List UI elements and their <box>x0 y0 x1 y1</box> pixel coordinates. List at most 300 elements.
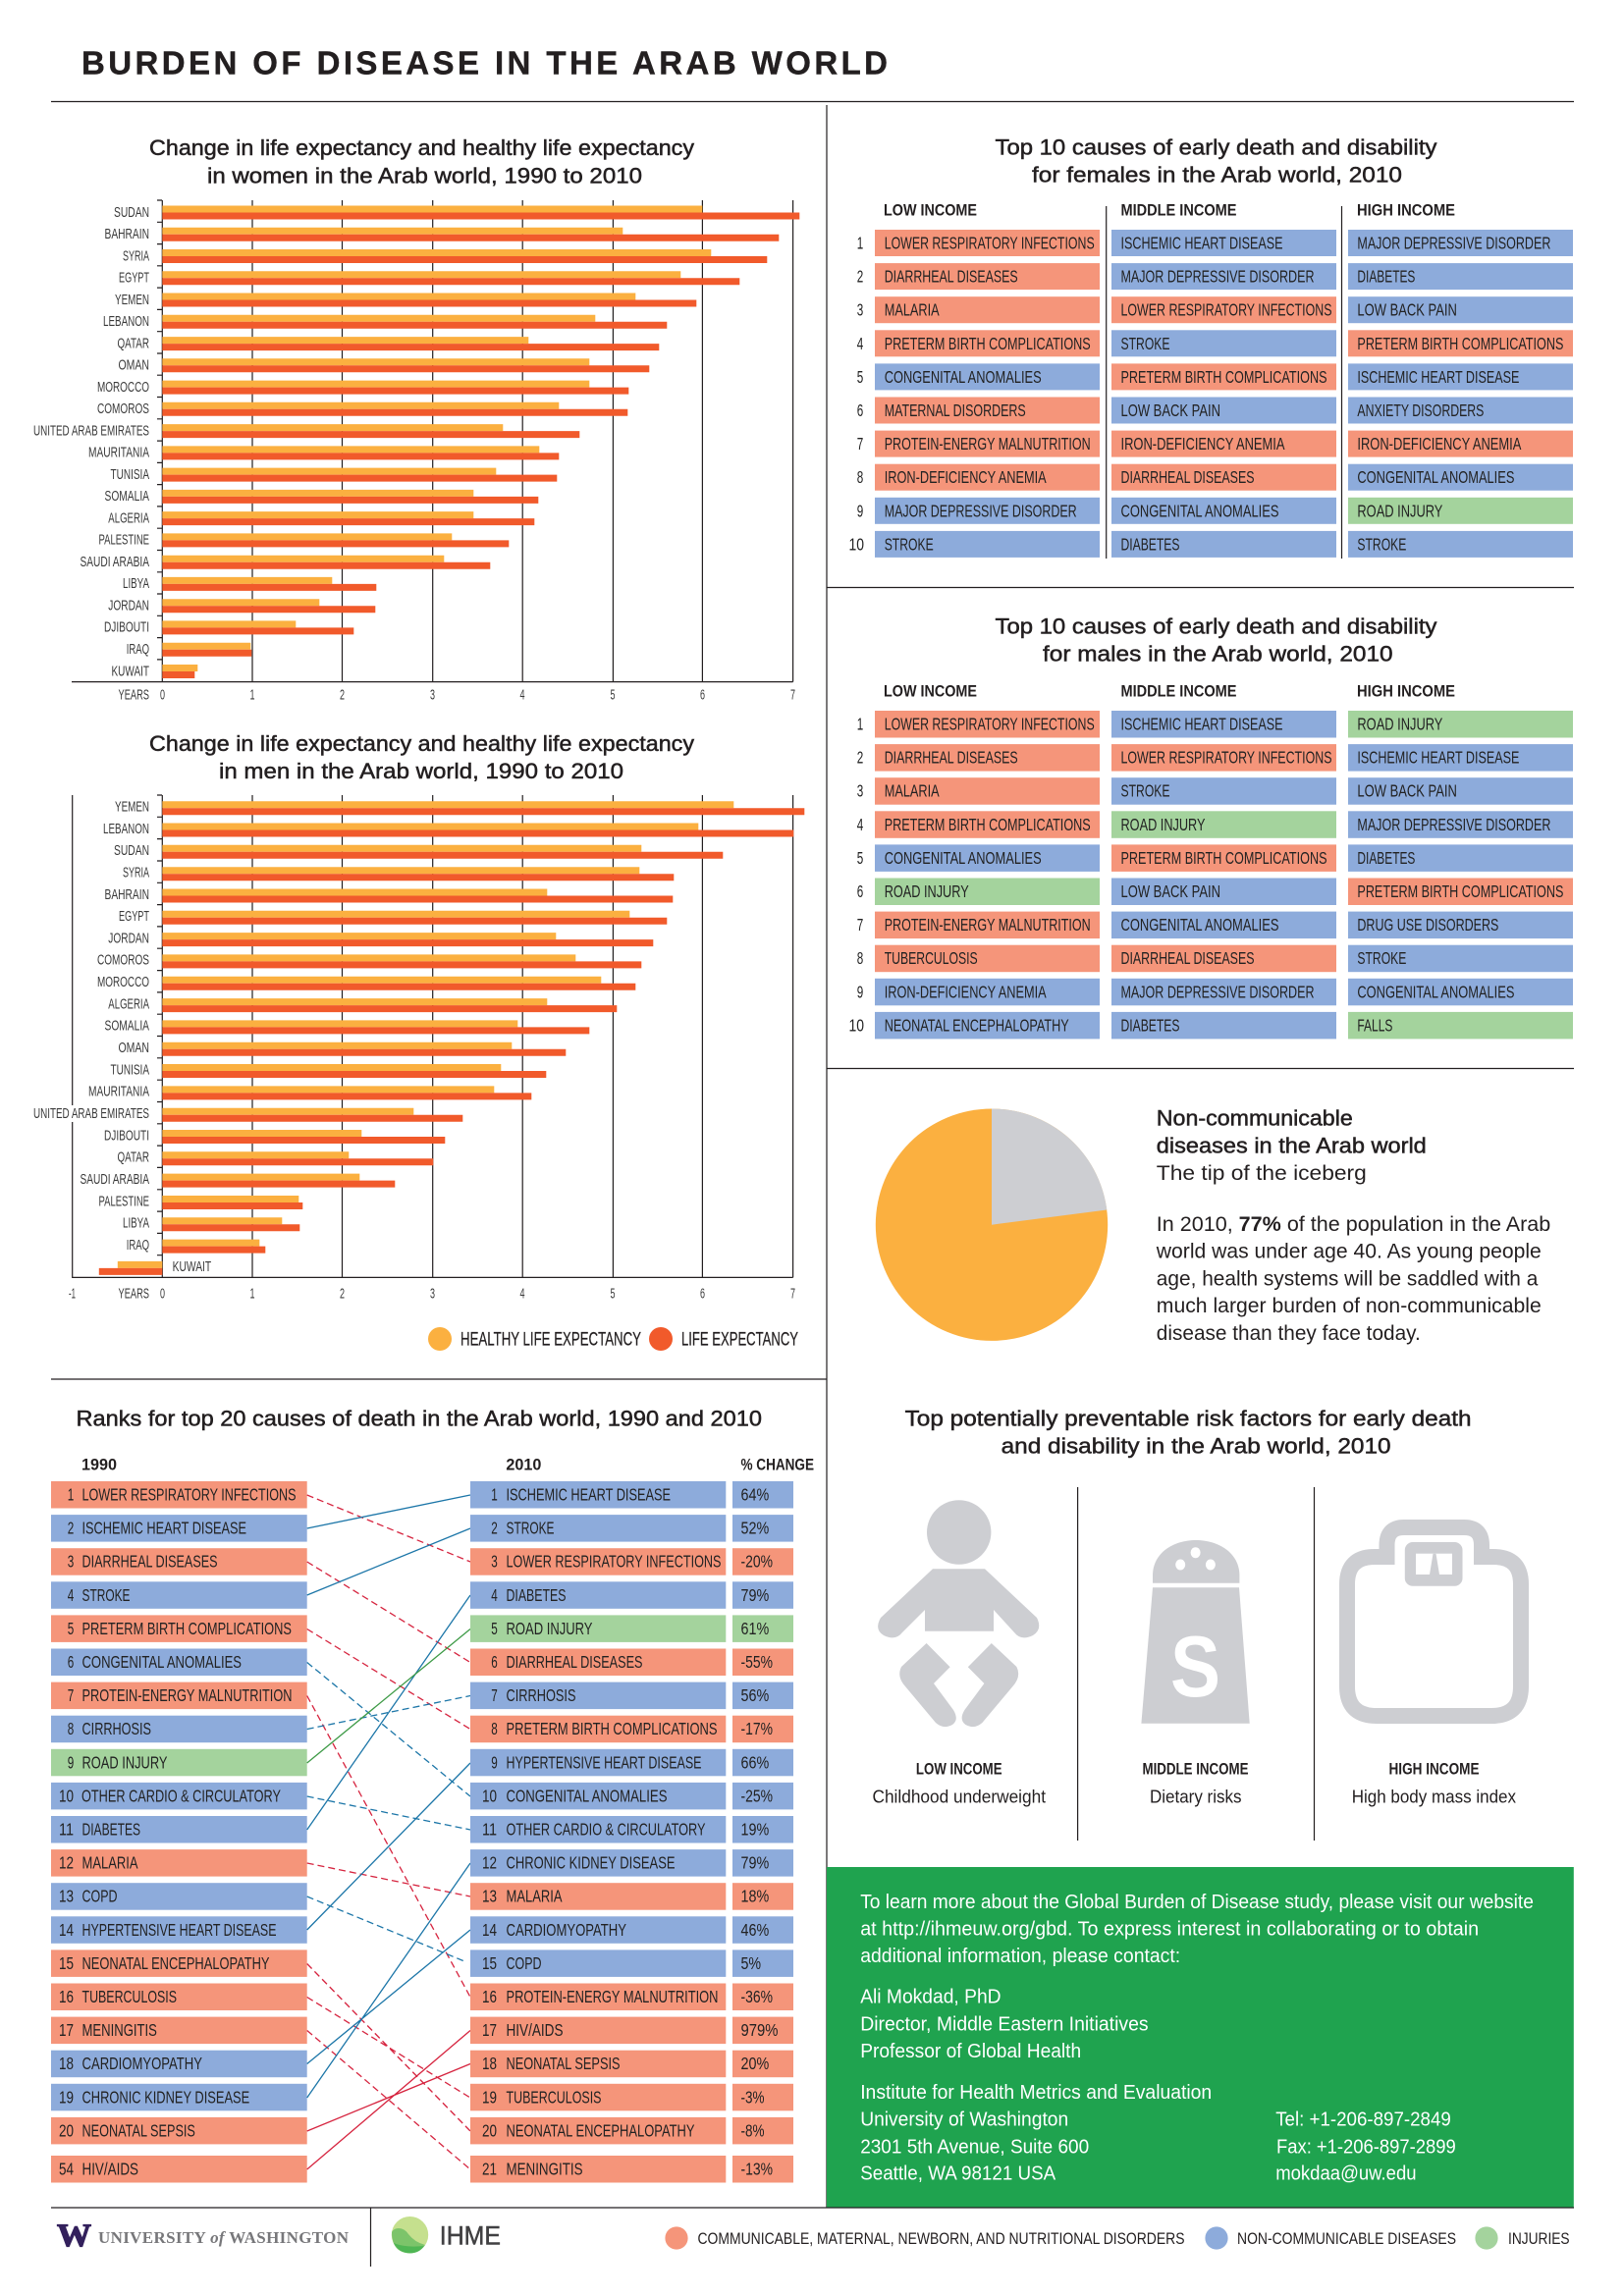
panel: men life expectancy chart <box>33 731 804 1351</box>
title: BURDEN OF DISEASE IN THE ARAB WORLD <box>81 45 888 80</box>
column: 1990 ranks: NEONATAL SEPSIS <box>82 2120 195 2140</box>
column: 1990 ranks: ROAD INJURY <box>82 1752 168 1772</box>
column: middle income females: PRETERM BIRTH COMPLICATIONS <box>1121 367 1327 387</box>
axis labels: men: 5 <box>611 1286 615 1302</box>
column: percent change: 19% <box>740 1820 769 1840</box>
country labels: men: SYRIA <box>123 866 149 881</box>
column: low income females: MALARIA <box>885 300 940 320</box>
column: 2010 ranks: STROKE <box>507 1519 554 1538</box>
column: high income males: DIABETES <box>1357 848 1415 868</box>
bars: healthy life expectancy, men <box>118 801 733 1268</box>
column: high income males <box>1348 711 1573 1039</box>
column: percent change: 46% <box>740 1920 769 1940</box>
column: percent change: -55% <box>740 1652 773 1672</box>
column: 2010 ranks: DIABETES <box>507 1585 566 1605</box>
legend: disease categories: COMMUNICABLE, MATERNAL, NEWBORN, AND NUTRITIONAL DISORDERS <box>697 2230 1184 2248</box>
column: high income females: ROAD INJURY <box>1357 501 1443 520</box>
column: 2010 ranks: 6 <box>491 1652 498 1672</box>
country labels: men: SAUDI ARABIA <box>81 1172 149 1188</box>
rank numbers: males: 1 <box>857 715 863 734</box>
rank numbers: males: 5 <box>857 848 863 868</box>
logo: IHME: IHME <box>440 2221 501 2251</box>
axis labels: women: 7 <box>790 687 795 703</box>
column: 1990 ranks: HYPERTENSIVE HEART DISEASE <box>82 1920 277 1940</box>
chart axes <box>73 795 793 1277</box>
column: low income females: IRON-DEFICIENCY ANEMIA <box>885 467 1047 487</box>
column: 2010 ranks: LOWER RESPIRATORY INFECTIONS <box>507 1552 721 1572</box>
rank numbers: females: 10 <box>848 534 864 554</box>
column: 2010 ranks: 15 <box>482 1953 497 1973</box>
column: 2010 ranks: TUBERCULOSIS <box>507 2087 601 2107</box>
column: 2010 ranks: 18 <box>482 2054 497 2073</box>
column: 2010 ranks: MALARIA <box>507 1887 563 1906</box>
column: low income males: PRETERM BIRTH COMPLICATIONS <box>885 815 1091 834</box>
panel: top 10 causes for females <box>848 134 1573 559</box>
column: 1990 ranks: MALARIA <box>82 1853 138 1873</box>
column headers: females <box>884 200 1455 219</box>
column: 2010 ranks: COPD <box>507 1953 542 1973</box>
column: 2010 ranks: PROTEIN-ENERGY MALNUTRITION <box>507 1987 719 2006</box>
column: 1990 ranks: 10 <box>59 1786 74 1805</box>
column: low income males: IRON-DEFICIENCY ANEMIA <box>885 982 1047 1001</box>
country labels: women: OMAN <box>118 358 149 374</box>
column: 2010 ranks: 5 <box>491 1619 498 1638</box>
column: 1990 ranks: 13 <box>59 1887 74 1906</box>
label: middle income risk <box>1143 1760 1249 1807</box>
column: 2010 ranks: 8 <box>491 1719 498 1738</box>
column: high income males: DRUG USE DISORDERS <box>1357 915 1498 934</box>
label: high income risk: High body mass index <box>1352 1788 1516 1807</box>
column: percent change: -13% <box>740 2160 773 2179</box>
column: 2010 ranks: CARDIOMYOPATHY <box>507 1920 626 1940</box>
rank numbers: males: 10 <box>848 1015 864 1035</box>
country labels: men: DJIBOUTI <box>104 1128 149 1144</box>
column: 1990 ranks: 9 <box>68 1752 74 1772</box>
column: low income females: DIARRHEAL DISEASES <box>885 267 1018 287</box>
country labels: men: JORDAN <box>108 931 149 946</box>
country labels: men: SOMALIA <box>104 1019 149 1035</box>
column: low income males: NEONATAL ENCEPHALOPATHY <box>885 1015 1069 1035</box>
column: 1990 ranks: DIABETES <box>82 1820 140 1840</box>
column: 1990 ranks: 2 <box>68 1519 74 1538</box>
heading: risk factors: and disability in the Arab world, 2010 <box>1001 1434 1391 1459</box>
text block: contact person <box>860 1987 1149 2062</box>
heading: women chart: in women in the Arab world, 1990 to 2010 <box>207 163 642 188</box>
column: 1990 ranks: 4 <box>68 1585 74 1605</box>
rank numbers: males: 2 <box>857 748 863 768</box>
body text: age, health systems will be saddled with a <box>1157 1268 1539 1291</box>
country labels: men: TUNISIA <box>110 1062 149 1078</box>
column: middle income females: CONGENITAL ANOMALIES <box>1121 501 1278 520</box>
column: low income males: DIARRHEAL DISEASES <box>885 748 1018 768</box>
axis labels: women: 1 <box>249 687 255 703</box>
heading: risk factors <box>905 1407 1472 1459</box>
heading: non-communicable diseases: diseases in the Arab world <box>1157 1134 1427 1158</box>
column: 1990 ranks: TUBERCULOSIS <box>82 1987 177 2006</box>
column: middle income females <box>1111 230 1336 558</box>
text block: learn more: additional information, please contact: <box>860 1946 1180 1967</box>
country label: Kuwait: KUWAIT <box>173 1259 211 1275</box>
heading: women chart: Change in life expectancy and healthy life expectancy <box>149 135 694 160</box>
rank numbers: males: 6 <box>857 881 863 901</box>
column: low income males: PROTEIN-ENERGY MALNUTRITION <box>885 915 1091 934</box>
axis labels: men <box>69 1286 795 1302</box>
text block: learn more: at http://ihmeuw.org/gbd. To express interest in collaborating or to obtain <box>860 1918 1479 1940</box>
label: high income risk <box>1352 1760 1516 1807</box>
axis labels: men: 7 <box>790 1286 795 1302</box>
column: low income males <box>875 711 1100 1039</box>
footer <box>51 2208 1574 2267</box>
country labels: men: UNITED ARAB EMIRATES <box>33 1106 149 1122</box>
column: percent change: 79% <box>740 1853 769 1873</box>
country labels: women: SYRIA <box>123 248 149 264</box>
label: low income risk: Childhood underweight <box>872 1788 1046 1807</box>
country labels: women: QATAR <box>118 336 149 351</box>
heading: females: Top 10 causes of early death and disability <box>996 134 1437 159</box>
column: high income females: LOW BACK PAIN <box>1357 300 1457 320</box>
column: 2010 ranks: 7 <box>491 1685 498 1705</box>
column: 2010 ranks: 14 <box>482 1920 497 1940</box>
column: middle income females: ISCHEMIC HEART DISEASE <box>1121 234 1282 253</box>
rank numbers: females: 7 <box>857 434 863 454</box>
column: low income males: TUBERCULOSIS <box>885 948 978 968</box>
column: 1990 ranks: 15 <box>59 1953 74 1973</box>
column: 1990 ranks: 8 <box>68 1719 74 1738</box>
axis labels: women: 2 <box>340 687 345 703</box>
column: high income males: LOW BACK PAIN <box>1357 781 1457 801</box>
country labels: women: KUWAIT <box>112 664 149 679</box>
column: 1990 ranks <box>51 1481 307 2183</box>
body text: In 2010, 77% of the population in the Arab <box>1157 1213 1550 1236</box>
column: high income males: MAJOR DEPRESSIVE DISORDER <box>1357 815 1550 834</box>
column: middle income females: IRON-DEFICIENCY ANEMIA <box>1121 434 1285 454</box>
column headers: ranks: 1990 <box>81 1455 117 1473</box>
column: 2010 ranks: ISCHEMIC HEART DISEASE <box>507 1484 671 1504</box>
column: 1990 ranks: DIARRHEAL DISEASES <box>82 1552 218 1572</box>
axis labels: women: 6 <box>700 687 705 703</box>
column: 1990 ranks: 7 <box>68 1685 74 1705</box>
panel: non-communicable diseases <box>876 1106 1550 1345</box>
chart axes <box>72 200 793 682</box>
legend: life expectancy <box>428 1327 798 1351</box>
rank numbers: males: 9 <box>857 982 863 1001</box>
column: 1990 ranks: PRETERM BIRTH COMPLICATIONS <box>82 1619 292 1638</box>
body text: disease than they face today. <box>1157 1322 1421 1345</box>
column: middle income females: DIARRHEAL DISEASES <box>1121 467 1255 487</box>
column: 1990 ranks: OTHER CARDIO & CIRCULATORY <box>81 1786 281 1805</box>
country labels: men: ALGERIA <box>108 996 149 1012</box>
logo: IHME <box>392 2216 501 2253</box>
column: middle income males: LOW BACK PAIN <box>1121 881 1220 901</box>
rank numbers: males: 8 <box>857 948 863 968</box>
country labels: women: PALESTINE <box>98 533 149 549</box>
column: 1990 ranks: 14 <box>59 1920 74 1940</box>
panel: ranks for top 20 causes of death <box>51 1406 814 2183</box>
column: 2010 ranks: PRETERM BIRTH COMPLICATIONS <box>507 1719 717 1738</box>
column: high income males: FALLS <box>1357 1015 1392 1035</box>
column: 2010 ranks: CONGENITAL ANOMALIES <box>507 1786 668 1805</box>
column: middle income females: LOWER RESPIRATORY INFECTIONS <box>1121 300 1331 320</box>
body text: world was under age 40. As young people <box>1156 1241 1542 1263</box>
column: middle income males: DIARRHEAL DISEASES <box>1121 948 1255 968</box>
column: middle income females: LOW BACK PAIN <box>1121 400 1220 420</box>
country labels: men: LIBYA <box>123 1216 149 1232</box>
panel: contact information <box>827 1867 1574 2208</box>
column: 2010 ranks: 11 <box>482 1820 497 1840</box>
axis labels: men: 4 <box>520 1286 524 1302</box>
text block: address: 2301 5th Avenue, Suite 600 <box>860 2136 1089 2158</box>
bars: healthy life expectancy, women <box>162 206 711 671</box>
column: middle income males: STROKE <box>1121 781 1170 801</box>
column: 2010 ranks: 12 <box>482 1853 497 1873</box>
country labels: women: YEMEN <box>115 293 149 308</box>
rank numbers: females: 8 <box>857 467 863 487</box>
country labels: women: TUNISIA <box>110 467 149 483</box>
country labels: men: COMOROS <box>97 953 149 969</box>
text block: learn more <box>860 1892 1534 1967</box>
country labels: women <box>33 205 149 679</box>
rank numbers: females: 9 <box>857 501 863 520</box>
axis labels: women: 4 <box>520 687 524 703</box>
column: 1990 ranks: CARDIOMYOPATHY <box>82 2054 202 2073</box>
column: low income females: CONGENITAL ANOMALIES <box>885 367 1042 387</box>
axis labels: women: 0 <box>160 687 165 703</box>
column: 1990 ranks: PROTEIN-ENERGY MALNUTRITION <box>82 1685 293 1705</box>
axis labels: women: YEARS <box>118 687 149 703</box>
column: percent change: -20% <box>740 1552 773 1572</box>
logo: University of Washington: W <box>57 2218 91 2254</box>
column: 2010 ranks: HYPERTENSIVE HEART DISEASE <box>507 1752 701 1772</box>
legend: life expectancy: HEALTHY LIFE EXPECTANCY <box>460 1329 641 1351</box>
column: 2010 ranks: MENINGITIS <box>507 2160 583 2179</box>
column: low income females: LOWER RESPIRATORY INFECTIONS <box>885 234 1095 253</box>
column: percent change: 52% <box>740 1519 769 1538</box>
column: 2010 ranks: NEONATAL SEPSIS <box>507 2054 621 2073</box>
heading: non-communicable diseases: Non-communicable <box>1157 1106 1353 1131</box>
label: low income risk: LOW INCOME <box>916 1760 1002 1779</box>
column: middle income males: MAJOR DEPRESSIVE DISORDER <box>1121 982 1314 1001</box>
country labels: women: SUDAN <box>114 205 149 221</box>
column: middle income males: DIABETES <box>1121 1015 1180 1035</box>
axis labels: men: 2 <box>340 1286 345 1302</box>
rank numbers: males: 4 <box>857 815 863 834</box>
column: percent change: 64% <box>740 1484 769 1504</box>
column: 2010 ranks: NEONATAL ENCEPHALOPATHY <box>507 2120 695 2140</box>
column: high income males: CONGENITAL ANOMALIES <box>1357 982 1514 1001</box>
heading: women chart <box>149 135 694 188</box>
column: 1990 ranks: 54 <box>59 2160 74 2179</box>
column: low income females: PRETERM BIRTH COMPLICATIONS <box>885 334 1091 353</box>
heading: ranks: Ranks for top 20 causes of death in the Arab world, 1990 and 2010 <box>77 1406 762 1430</box>
column: 1990 ranks: CONGENITAL ANOMALIES <box>82 1652 242 1672</box>
column: 1990 ranks: CHRONIC KIDNEY DISEASE <box>82 2087 249 2107</box>
body text <box>1156 1213 1550 1345</box>
column: 1990 ranks: STROKE <box>82 1585 130 1605</box>
column: low income females: MAJOR DEPRESSIVE DISORDER <box>885 501 1077 520</box>
column: low income females: PROTEIN-ENERGY MALNUTRITION <box>885 434 1091 454</box>
column: 1990 ranks: NEONATAL ENCEPHALOPATHY <box>82 1953 270 1973</box>
heading: men chart <box>149 731 694 783</box>
column: 1990 ranks: 6 <box>68 1652 74 1672</box>
column: middle income females: DIABETES <box>1121 534 1180 554</box>
country labels: women: UNITED ARAB EMIRATES <box>33 423 149 439</box>
body text: much larger burden of non-communicable <box>1157 1295 1542 1317</box>
icon: salt shaker <box>1141 1540 1250 1724</box>
bars: life expectancy, women <box>162 212 799 678</box>
column: high income females: IRON-DEFICIENCY ANEMIA <box>1357 434 1522 454</box>
country labels: women: BAHRAIN <box>104 227 149 242</box>
column: middle income males: LOWER RESPIRATORY INFECTIONS <box>1121 748 1331 768</box>
panel: women life expectancy chart <box>33 135 799 703</box>
country labels: men: MOROCCO <box>97 975 149 990</box>
column headers: males <box>884 681 1455 700</box>
column: 1990 ranks: 16 <box>59 1987 74 2006</box>
column: 1990 ranks: ISCHEMIC HEART DISEASE <box>82 1519 246 1538</box>
column headers: females: LOW INCOME <box>884 200 977 219</box>
axis labels: men: 3 <box>430 1286 435 1302</box>
column: high income females: MAJOR DEPRESSIVE DISORDER <box>1357 234 1550 253</box>
column: 2010 ranks: ROAD INJURY <box>507 1619 593 1638</box>
axis labels: women <box>118 687 795 703</box>
rank numbers: females: 3 <box>857 300 863 320</box>
bars: life expectancy, men <box>99 808 804 1275</box>
column: high income females: DIABETES <box>1357 267 1415 287</box>
column: percent change: 979% <box>740 2020 778 2040</box>
country labels: men <box>33 799 149 1254</box>
panel: top preventable risk factors <box>872 1407 1521 1841</box>
label: middle income risk: Dietary risks <box>1150 1788 1241 1807</box>
text block: address: Institute for Health Metrics and Evaluation <box>860 2082 1212 2104</box>
column: percent change: 20% <box>740 2054 769 2073</box>
country labels: men: MAURITANIA <box>88 1085 149 1100</box>
column: middle income males: CONGENITAL ANOMALIES <box>1121 915 1278 934</box>
text block: address: Seattle, WA 98121 USA <box>860 2163 1056 2185</box>
axis labels: men: 6 <box>700 1286 705 1302</box>
column: percent change: 5% <box>740 1953 761 1973</box>
heading: males: Top 10 causes of early death and disability <box>996 614 1437 638</box>
country labels: women: LEBANON <box>103 314 149 330</box>
country labels: women: SAUDI ARABIA <box>81 555 149 570</box>
column: middle income females: MAJOR DEPRESSIVE DISORDER <box>1121 267 1314 287</box>
text block: learn more: To learn more about the Global Burden of Disease study, please visit our website <box>860 1892 1534 1913</box>
column: 1990 ranks: 1 <box>68 1484 74 1504</box>
column: high income males: ROAD INJURY <box>1357 715 1443 734</box>
column: percent change: -25% <box>740 1786 773 1805</box>
rank numbers: females: 5 <box>857 367 863 387</box>
column: low income females: STROKE <box>885 534 934 554</box>
column: high income females: STROKE <box>1357 534 1406 554</box>
text block: phone and email: Fax: +1-206-897-2899 <box>1276 2136 1456 2158</box>
country labels: men: SUDAN <box>114 843 149 859</box>
subheading: The tip of the iceberg <box>1157 1162 1367 1185</box>
column: 2010 ranks: 16 <box>482 1987 497 2006</box>
column: 1990 ranks: MENINGITIS <box>82 2020 157 2040</box>
column: middle income males: ROAD INJURY <box>1121 815 1206 834</box>
heading: men chart: in men in the Arab world, 1990 to 2010 <box>219 759 623 783</box>
rank numbers: females <box>848 234 864 554</box>
column: 2010 ranks: 3 <box>491 1552 498 1572</box>
text block: address <box>860 2082 1212 2185</box>
column headers: ranks: % CHANGE <box>740 1455 814 1473</box>
label: middle income risk: MIDDLE INCOME <box>1143 1760 1249 1779</box>
column: 2010 ranks: 4 <box>491 1585 498 1605</box>
column: 2010 ranks: CHRONIC KIDNEY DISEASE <box>507 1853 676 1873</box>
column: middle income females: STROKE <box>1121 334 1170 353</box>
heading: men chart: Change in life expectancy and healthy life expectancy <box>149 731 694 756</box>
column: 2010 ranks: 2 <box>491 1519 498 1538</box>
legend: disease categories <box>665 2226 1570 2250</box>
country labels: women: LIBYA <box>123 576 149 592</box>
country labels: women: JORDAN <box>108 599 149 614</box>
column: low income males: LOWER RESPIRATORY INFECTIONS <box>885 715 1095 734</box>
country labels: men: OMAN <box>118 1041 149 1056</box>
label: high income risk: HIGH INCOME <box>1388 1760 1479 1779</box>
column: 2010 ranks: 20 <box>482 2120 497 2140</box>
column: percent change: -3% <box>740 2087 764 2107</box>
rank numbers: males: 7 <box>857 915 863 934</box>
axis labels: men: YEARS <box>118 1286 149 1302</box>
column: percent change: -8% <box>740 2120 764 2140</box>
text block: phone and email: Tel: +1-206-897-2849 <box>1275 2109 1451 2131</box>
panel: top 10 causes for males <box>848 614 1573 1039</box>
column: 1990 ranks: 17 <box>59 2020 74 2040</box>
column: 2010 ranks: DIARRHEAL DISEASES <box>507 1652 642 1672</box>
column: middle income males: PRETERM BIRTH COMPLICATIONS <box>1121 848 1327 868</box>
column: 1990 ranks: HIV/AIDS <box>82 2160 138 2179</box>
column: 1990 ranks: COPD <box>82 1887 118 1906</box>
country labels: women: ALGERIA <box>108 510 149 526</box>
column: percent change: 61% <box>740 1619 769 1638</box>
column: middle income males: ISCHEMIC HEART DISEASE <box>1121 715 1282 734</box>
text block: address: University of Washington <box>860 2109 1068 2131</box>
column headers: males: HIGH INCOME <box>1357 681 1455 700</box>
column: percent change: 79% <box>740 1585 769 1605</box>
icon: weighing scale <box>1347 1527 1521 1716</box>
column headers: ranks <box>81 1455 814 1473</box>
icon: baby <box>878 1500 1039 1727</box>
label: low income risk <box>872 1760 1046 1807</box>
rank numbers: females: 6 <box>857 400 863 420</box>
column: 2010 ranks: HIV/AIDS <box>507 2020 564 2040</box>
column: 1990 ranks: 5 <box>68 1619 74 1638</box>
column: high income females: ANXIETY DISORDERS <box>1357 400 1484 420</box>
column: 1990 ranks: 20 <box>59 2120 74 2140</box>
legend: disease categories: INJURIES <box>1508 2230 1570 2248</box>
country labels: men: LEBANON <box>103 822 149 837</box>
country labels: men: QATAR <box>118 1150 149 1166</box>
axis labels: men: 1 <box>249 1286 255 1302</box>
logo: University of Washington <box>57 2218 350 2254</box>
column: 2010 ranks: CIRRHOSIS <box>507 1685 575 1705</box>
text block: contact person: Director, Middle Eastern Initiatives <box>860 2014 1149 2036</box>
axis labels: men: -1 <box>69 1286 76 1302</box>
column: 2010 ranks: 10 <box>482 1786 497 1805</box>
rank numbers: males: 3 <box>857 781 863 801</box>
column: high income females <box>1348 230 1573 558</box>
column: percent change: -36% <box>740 1987 773 2006</box>
rank numbers: females: 4 <box>857 334 863 353</box>
axis labels: women: 5 <box>611 687 615 703</box>
country labels: women: SOMALIA <box>104 489 149 505</box>
column: high income females: ISCHEMIC HEART DISEASE <box>1357 367 1519 387</box>
logo: University of Washington: UNIVERSITY of WASHINGTON <box>98 2228 350 2247</box>
column headers: females: HIGH INCOME <box>1357 200 1455 219</box>
column: low income females <box>875 230 1100 558</box>
column: percent change: -17% <box>740 1719 773 1738</box>
country labels: women: MAURITANIA <box>88 446 149 461</box>
country labels: women: COMOROS <box>97 401 149 417</box>
column: percent change <box>732 1481 793 2183</box>
